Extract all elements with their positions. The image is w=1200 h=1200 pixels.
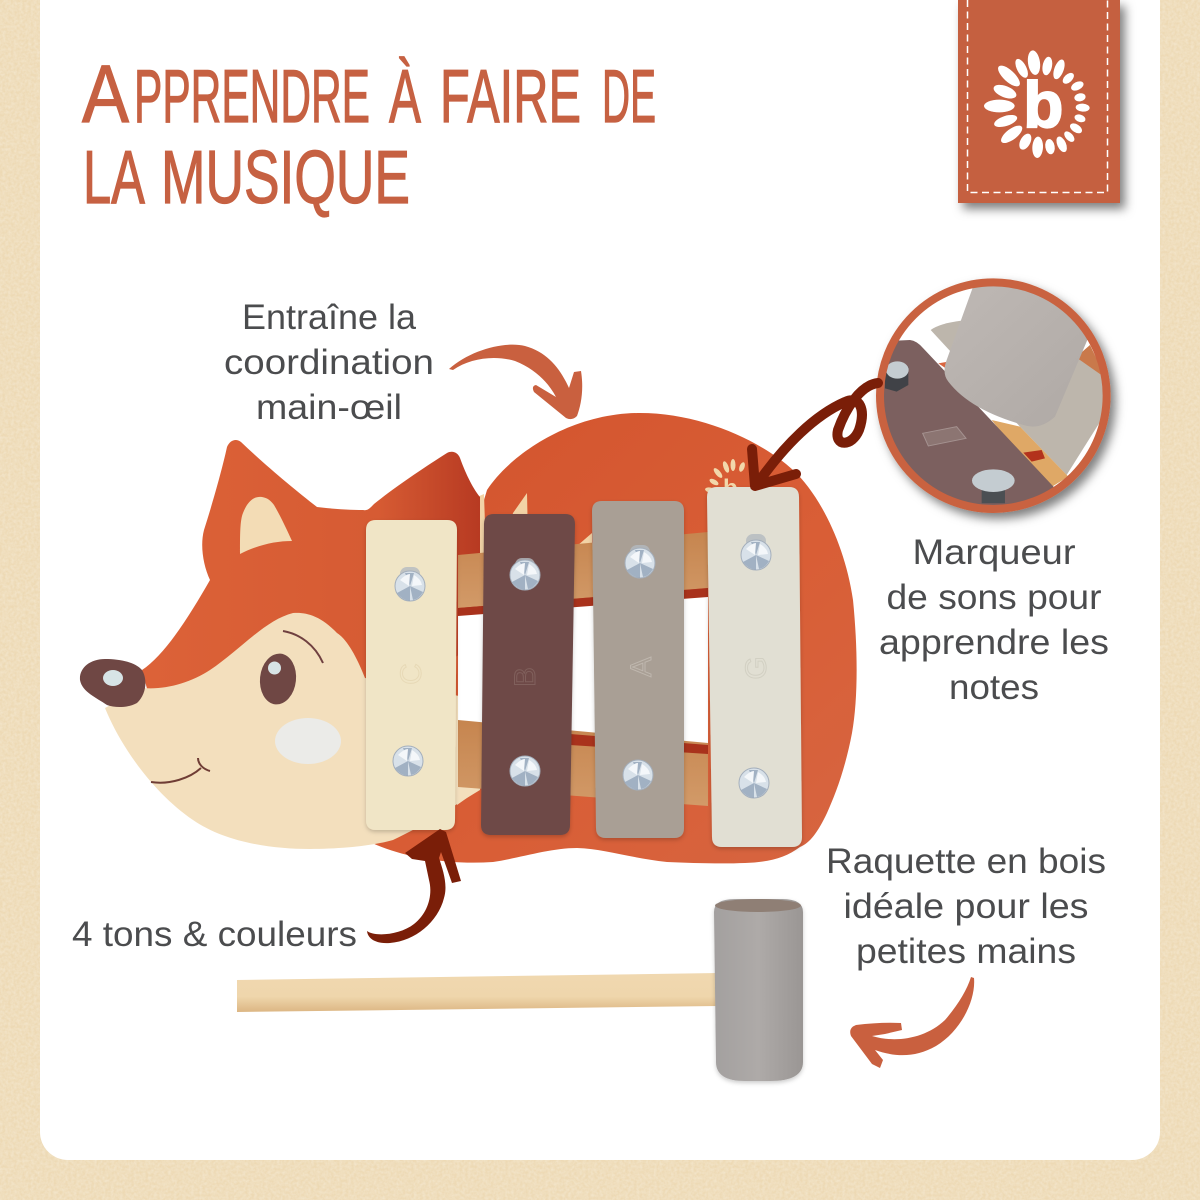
text: marker: de sons pour [886, 578, 1102, 617]
embossed notes: B [509, 667, 542, 687]
text: mallet: idéale pour les [844, 887, 1088, 926]
nose [80, 659, 145, 707]
window cut-out [458, 594, 708, 748]
eyebrow [283, 631, 323, 663]
orange glimpse [938, 362, 946, 368]
arrow: to mallet [850, 977, 974, 1068]
magnifier inset [873, 273, 1113, 523]
text: tones: 4 tons & couleurs [72, 915, 357, 954]
mallet in detail [944, 286, 1088, 426]
rear wooden rail [1079, 345, 1100, 374]
mallet [237, 899, 803, 1081]
embossed notes: C [395, 663, 428, 685]
icon: brand flower logo: b [1023, 68, 1063, 141]
text: marker: apprendre les [879, 623, 1109, 662]
small body logo: b [723, 475, 738, 502]
wood strip in detail [992, 420, 1068, 490]
fox xylophone [80, 413, 857, 863]
upper wooden rail [458, 532, 708, 608]
title: FAIRE [440, 54, 581, 138]
arrow: to bars [367, 829, 461, 943]
embossed notes: A [625, 657, 658, 677]
title [82, 49, 656, 219]
eye [257, 652, 299, 706]
text: coordination [224, 298, 434, 427]
lower wooden rail [458, 720, 708, 806]
text: marker: notes [949, 668, 1039, 707]
text: marker [879, 533, 1109, 707]
text: mallet: Raquette en bois [826, 842, 1106, 881]
fox head [142, 440, 480, 720]
bar A taupe [592, 501, 684, 838]
bar B brown [481, 514, 575, 835]
cream fur accents [477, 493, 592, 555]
title: MUSIQUE [161, 135, 410, 219]
rivets [393, 540, 771, 798]
small body logo [705, 459, 746, 502]
text: marker: Marqueur [912, 533, 1076, 572]
mallet head [714, 899, 803, 1081]
bar C cream [366, 520, 457, 830]
title: À [389, 54, 421, 138]
cheek [275, 718, 341, 764]
bar G ivory [707, 487, 802, 847]
upper rivet [885, 367, 908, 392]
inner ear [240, 497, 292, 554]
title: PPRENDRE [134, 54, 370, 138]
mallet handle [237, 973, 718, 1012]
title: A [82, 49, 129, 140]
smile [151, 758, 210, 783]
fox body [372, 413, 857, 863]
embossed letter [923, 427, 966, 446]
brand tag [958, 0, 1120, 203]
lower rivet [982, 490, 1005, 504]
bottom fur accents [457, 790, 478, 805]
icon: brand flower logo [984, 50, 1090, 158]
embossed notes [395, 656, 773, 687]
text: mallet: petites mains [856, 932, 1076, 971]
title: LA [83, 135, 145, 219]
embossed notes: G [740, 656, 773, 680]
text: coordination: coordination [224, 343, 434, 382]
brown bar in detail [884, 340, 1054, 505]
arrow: to body top [449, 345, 582, 419]
text: coordination: main-œil [256, 388, 402, 427]
fox face [105, 613, 480, 849]
taupe bar in detail [931, 321, 1113, 475]
title: DE [602, 54, 656, 138]
text: mallet [826, 842, 1106, 971]
text: coordination: Entraîne la [242, 298, 417, 337]
rivet stems [400, 534, 766, 581]
arrow: to tone marker [752, 383, 878, 486]
